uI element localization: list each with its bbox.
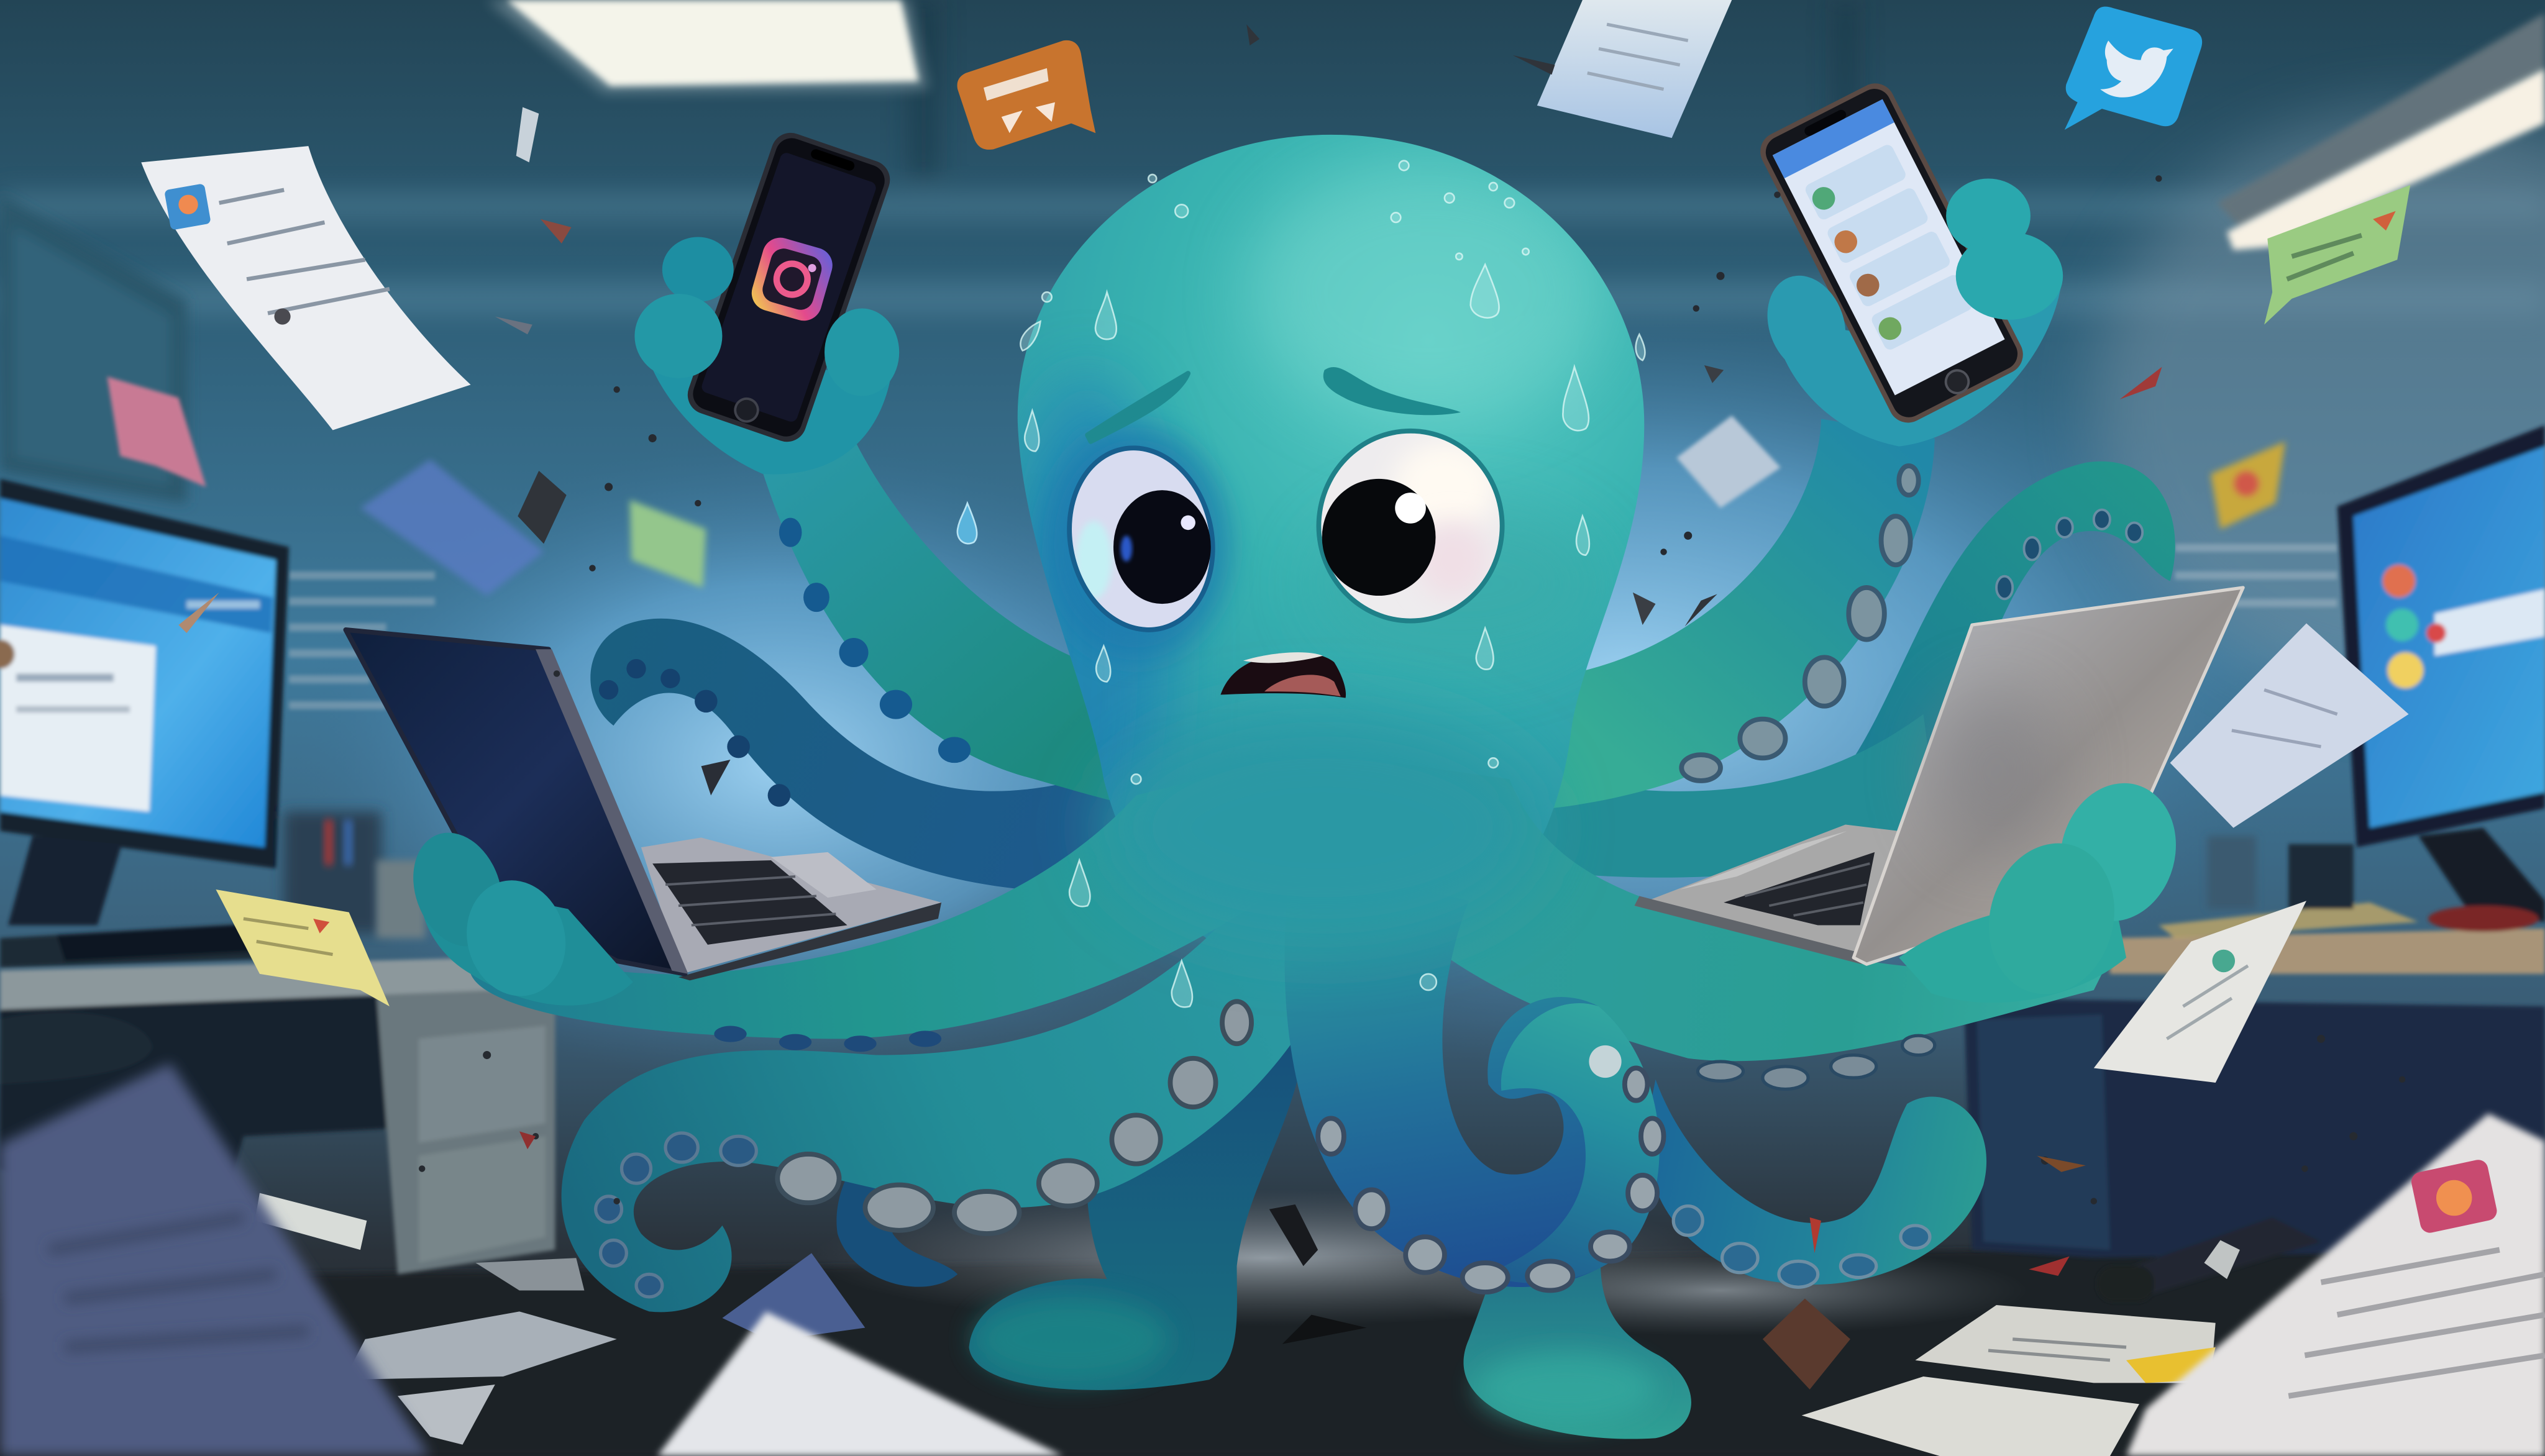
left eye [1067,445,1215,632]
chat bubble: orange [957,40,1095,150]
base [1635,824,1899,961]
lower left tentacle [562,860,1339,1312]
ceiling panels [0,0,2545,313]
upper left arm [760,435,1185,812]
chat bubble: green [2264,185,2410,325]
pupil [1113,490,1211,604]
foreground paper bottom centre [657,1311,1063,1456]
paper: floor right lower [1802,1376,2139,1456]
octopus face [1020,161,1645,1007]
right back arm to laptop [1461,714,1940,878]
scrap: dark [518,471,567,544]
mouse and cables [2159,836,2539,938]
scrap: left floor [255,1193,367,1250]
note: pink [107,376,206,487]
arm underside suckers [1697,1035,1935,1089]
shading [1007,162,1607,974]
front centre tentacle [1284,860,1664,1292]
monitor stand and keyboard [0,836,300,967]
phone [1753,76,2030,429]
fingers [1754,178,2063,384]
left desk with monitor [0,479,555,1274]
curl tip sucker [1589,1045,1622,1078]
paper: lower right [2094,901,2306,1083]
pupil [1322,479,1436,596]
octopus head and body [1007,135,1644,976]
paper: floor centre left [475,1258,584,1290]
right middle arm [1347,763,2110,1089]
lid [1853,588,2243,964]
suckers dark [596,1133,756,1297]
scattered debris [178,24,2405,1276]
trackpad [771,852,877,898]
left brow [1087,373,1188,442]
right eye [1317,429,1505,623]
suckers [1681,466,1919,781]
sweat drops [1020,161,1645,1007]
floor papers [344,1240,2240,1456]
foot highlight [974,1297,1169,1381]
office chair legs [2097,1217,2321,1302]
paper: right of head [1676,416,1781,508]
desk clutter [284,812,425,938]
base [679,903,941,980]
icon: twitter bubble [2065,7,2202,130]
chair [0,1012,153,1085]
window blinds [289,544,2337,709]
paper: floor right with emoji [1915,1305,2216,1383]
suckers [1996,510,2142,599]
left leg and foot [969,1039,1307,1390]
floating background papers and notes [107,0,2410,1250]
icon: instagram [747,234,837,325]
desktop [2110,929,2545,974]
back tentacle left [590,619,1136,893]
laptop right [1635,588,2243,964]
back wall glow [292,114,2545,1088]
monitor [2337,425,2545,847]
left hand palm [641,325,893,475]
scrap: dark floor [1282,1315,1367,1344]
desk body [1964,998,2545,1258]
left wall panel [0,195,186,503]
lid [345,630,685,974]
body blend [1103,714,1542,942]
right leg and foot [1463,1250,1691,1439]
note: yellow left [216,890,390,1006]
left middle arm [471,763,1299,1052]
left hand fingers [398,820,633,1008]
keyboard [1724,852,1875,925]
foreground paper bottom left [0,1063,430,1456]
right hand fingers [1899,770,2191,1008]
small curl behind [836,1055,1039,1287]
arm underside suckers [714,1026,941,1052]
keyboard [652,860,848,945]
curl shading [1485,1003,1660,1283]
mouth [1220,652,1346,698]
phone [682,127,895,447]
paper: top centre [1537,0,1732,138]
back tentacle right [1850,462,2175,771]
note: blue [360,460,544,596]
note: yellow orange [2211,442,2285,529]
suckers silver [777,1001,1251,1234]
floor [0,1190,2545,1456]
note: green small [630,500,706,588]
trackpad [1680,831,1847,890]
scrap: brown card [1763,1299,1850,1390]
note: blue floor [722,1253,865,1340]
filing cabinet [377,984,555,1274]
suckers [599,659,790,807]
suckers [1673,1206,1930,1287]
suckers [779,518,971,763]
monitor [0,479,289,868]
desk underside [0,990,552,1250]
ceiling light left [487,0,928,93]
phone left with instagram [634,127,899,475]
palm [1773,284,2062,447]
paper: floor left [344,1311,617,1380]
paper: floor small [398,1385,495,1445]
phone right with feed [1753,76,2063,447]
icon: app logo [2410,1158,2498,1234]
drop in air [957,503,977,544]
suckers [1318,1068,1664,1292]
paper: scrap top [516,107,539,162]
ceiling light right [2217,13,2545,250]
upper right arm [1493,419,1935,812]
right desk with monitor [1964,425,2545,1302]
right brow [1323,367,1461,415]
lower right tentacle [1647,1080,1986,1287]
fingers [634,237,899,396]
laptop left [345,630,941,980]
paper: right [2170,623,2409,828]
desktop [0,958,495,1009]
foreground paper bottom right [2126,1114,2545,1456]
monitor stand [2418,828,2545,922]
paper: top left [141,146,471,430]
scrap: floor right [2204,1240,2240,1279]
